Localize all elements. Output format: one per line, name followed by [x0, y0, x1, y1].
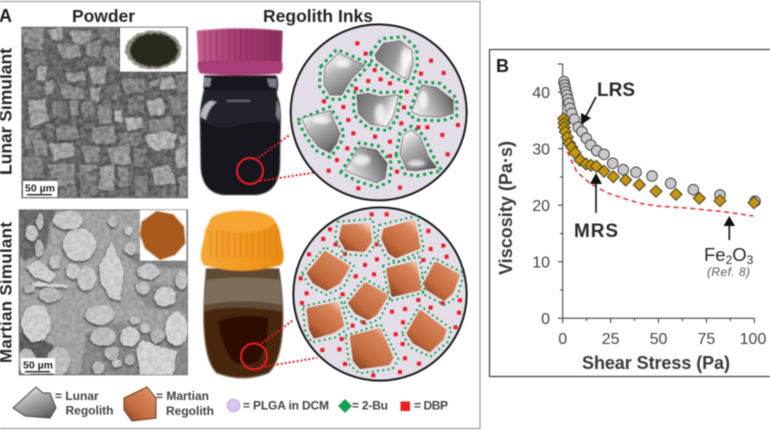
inset photo: martian powder — [140, 210, 186, 261]
chart: viscosity vs shear stress — [496, 64, 766, 373]
2-Bu dot shells — [302, 216, 464, 373]
scale bar: martian: 50 µm — [23, 360, 53, 372]
x tick labels — [558, 331, 766, 348]
x tick labels: 100 — [740, 331, 766, 348]
label: MRS with arrow — [574, 173, 618, 242]
DBP squares — [322, 41, 460, 190]
legend — [13, 387, 448, 421]
micrograph: lunar powder — [20, 27, 187, 198]
icon: PLGA — [227, 399, 240, 412]
icon: 2-Bu diamond — [338, 399, 352, 413]
scale bar: lunar: 50 µm — [25, 182, 55, 194]
panel B frame — [490, 50, 770, 376]
micrograph: martian powder — [17, 210, 188, 376]
y tick labels: 0 — [541, 311, 550, 328]
legend text: lunar regolith: Regolith — [66, 404, 114, 418]
2-Bu dot shells — [297, 37, 457, 187]
axes — [558, 64, 754, 323]
heading: Powder: Powder — [72, 6, 135, 26]
legend text: DBP: = DBP — [414, 398, 448, 412]
y tick labels — [532, 85, 550, 328]
legend text: 2-Bu: = 2-Bu — [352, 398, 388, 412]
y tick labels: 10 — [532, 254, 550, 272]
icon: lunar regolith — [13, 387, 56, 418]
y tick labels: 20 — [532, 198, 550, 215]
panel A frame — [0, 2, 480, 428]
label: Fe2O3 with arrow: 2 — [726, 253, 733, 267]
label: Fe2O3 with arrow: O — [732, 244, 747, 265]
legend text: PLGA in DCM: = PLGA in DCM — [243, 398, 329, 412]
label: Fe2O3 with arrow: (Ref. 8) — [707, 265, 750, 279]
label: Fe2O3 with arrow: 3 — [747, 253, 754, 267]
y tick labels: 30 — [532, 142, 550, 158]
photo: martian ink jar — [201, 211, 284, 378]
scale bar: lunar — [23, 181, 58, 197]
jar magnifier circle: lunar — [237, 158, 263, 184]
MRS data series — [558, 113, 760, 209]
icon: martian regolith — [124, 387, 156, 421]
callout: lunar ink magnified — [258, 24, 467, 200]
x tick labels: 0 — [558, 331, 567, 348]
LRS data series — [559, 76, 760, 207]
dotted leader lines — [258, 135, 313, 181]
inset photo: lunar powder — [120, 28, 186, 72]
Fe2O3 reference curve — [567, 152, 753, 216]
x axis title: Shear Stress (Pa) — [582, 353, 730, 373]
label: MRS with arrow: MRS — [574, 221, 618, 242]
y tick labels: 40 — [532, 85, 550, 102]
x tick labels: 25 — [602, 331, 620, 348]
dotted leader lines — [262, 320, 317, 367]
legend text: martian regolith: Regolith — [166, 404, 214, 418]
x tick labels: 50 — [650, 331, 668, 348]
legend text: martian regolith: = Martian — [156, 389, 209, 403]
legend text: lunar regolith: = Lunar — [55, 389, 99, 403]
label: Fe2O3 with arrow — [704, 216, 754, 279]
heading: Regolith Inks: Regolith Inks — [263, 6, 373, 26]
callout: martian ink magnified — [262, 207, 467, 381]
grain highlights — [313, 48, 428, 167]
x tick labels: 75 — [698, 331, 715, 348]
panel label B: B — [496, 56, 509, 76]
label: Fe2O3 with arrow: Fe — [704, 244, 726, 265]
martian regolith grains — [309, 222, 457, 367]
label: LRS with arrow — [581, 80, 635, 125]
label: LRS with arrow: LRS — [597, 80, 635, 101]
y axis title: Viscosity (Pa·s) — [496, 141, 516, 275]
icon: DBP square — [400, 402, 410, 411]
lunar regolith grains — [302, 41, 453, 183]
DBP squares — [299, 212, 462, 377]
photo: lunar ink jar — [197, 28, 283, 195]
jar magnifier circle: martian — [241, 344, 267, 370]
scale bar: martian — [21, 358, 55, 374]
